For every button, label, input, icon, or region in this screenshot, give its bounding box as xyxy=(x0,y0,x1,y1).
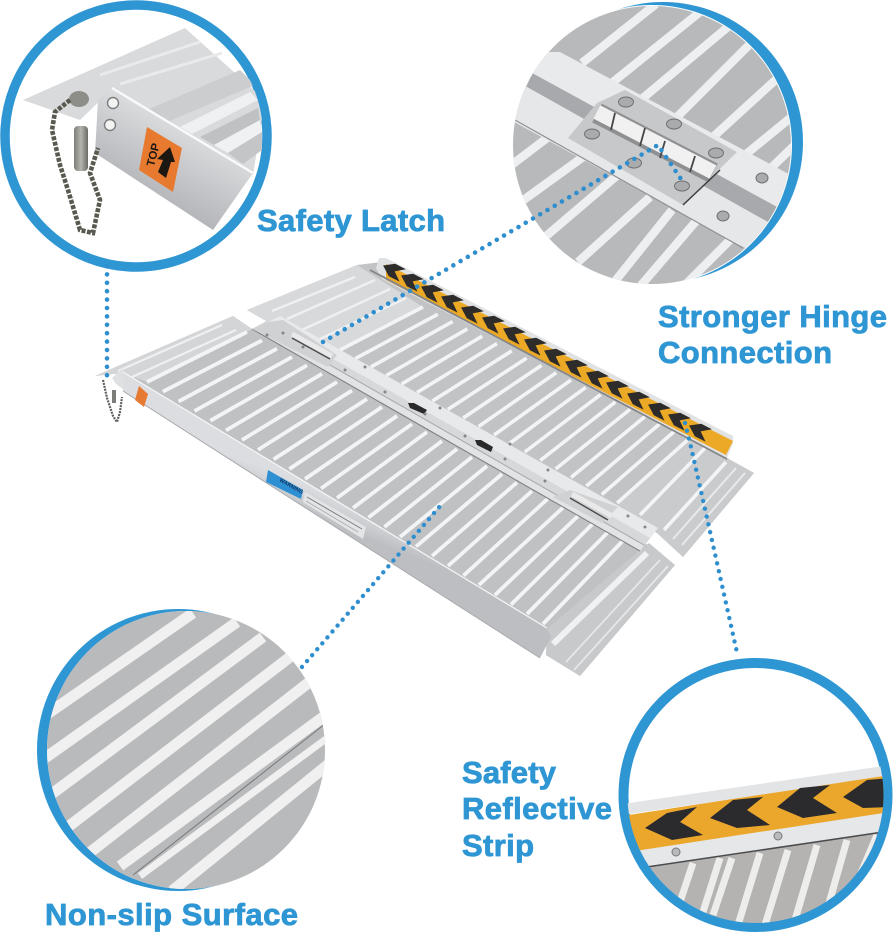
pin xyxy=(69,91,89,171)
label: safety reflective strip: Safety xyxy=(462,755,557,790)
top sticker on rail xyxy=(135,386,148,407)
label: stronger hinge connection: Connection xyxy=(658,335,832,370)
hinge rail bands xyxy=(505,52,800,250)
label: safety latch: Safety Latch xyxy=(257,203,445,238)
black chevrons xyxy=(645,778,890,840)
warning label on rail: WARNING xyxy=(278,478,304,496)
label: non-slip surface: Non-slip Surface xyxy=(45,897,298,932)
screws xyxy=(584,97,768,221)
lower ramp panel xyxy=(95,316,675,676)
blue crescent behind hinge photo xyxy=(523,2,803,282)
folding ramp product photo xyxy=(95,258,754,676)
deck surface xyxy=(23,28,265,175)
leader: hinge xyxy=(323,145,683,342)
deck stripes below strip xyxy=(643,822,881,923)
blue crescent behind surface photo xyxy=(37,609,319,891)
chain xyxy=(52,100,100,233)
striped deck xyxy=(513,6,791,284)
callout circle: safety latch xyxy=(5,5,267,267)
hinge plate xyxy=(568,90,737,205)
yellow strip band xyxy=(622,775,890,853)
grooved surface stripes xyxy=(47,611,325,889)
latch clips xyxy=(408,403,493,452)
folded hinge bars xyxy=(252,316,658,551)
small latch and chain xyxy=(103,368,124,422)
reflective strip on ramp xyxy=(370,258,733,459)
aluminium rails xyxy=(622,765,890,868)
side rail xyxy=(123,372,551,658)
strip screws xyxy=(672,832,782,856)
callout circle: non-slip surface xyxy=(37,605,335,895)
warning label on rail xyxy=(266,470,366,539)
label: stronger hinge connection: Stronger Hinge xyxy=(658,299,887,334)
leader: safety latch xyxy=(105,266,109,376)
callout circle: reflective strip xyxy=(620,663,890,934)
leader: non-slip surface xyxy=(302,505,441,667)
orange top sticker xyxy=(139,127,182,192)
label: safety reflective strip: Strip xyxy=(462,828,534,863)
orange top sticker: TOP xyxy=(145,142,163,168)
upper ramp panel xyxy=(247,262,754,557)
side rail close-up xyxy=(95,88,253,230)
leader: reflective strip xyxy=(685,423,738,657)
callout circle: hinge xyxy=(500,0,810,290)
label: safety reflective strip: Reflective xyxy=(462,791,612,826)
small hinge near front end xyxy=(553,490,618,523)
small hinge near far end xyxy=(252,320,337,367)
